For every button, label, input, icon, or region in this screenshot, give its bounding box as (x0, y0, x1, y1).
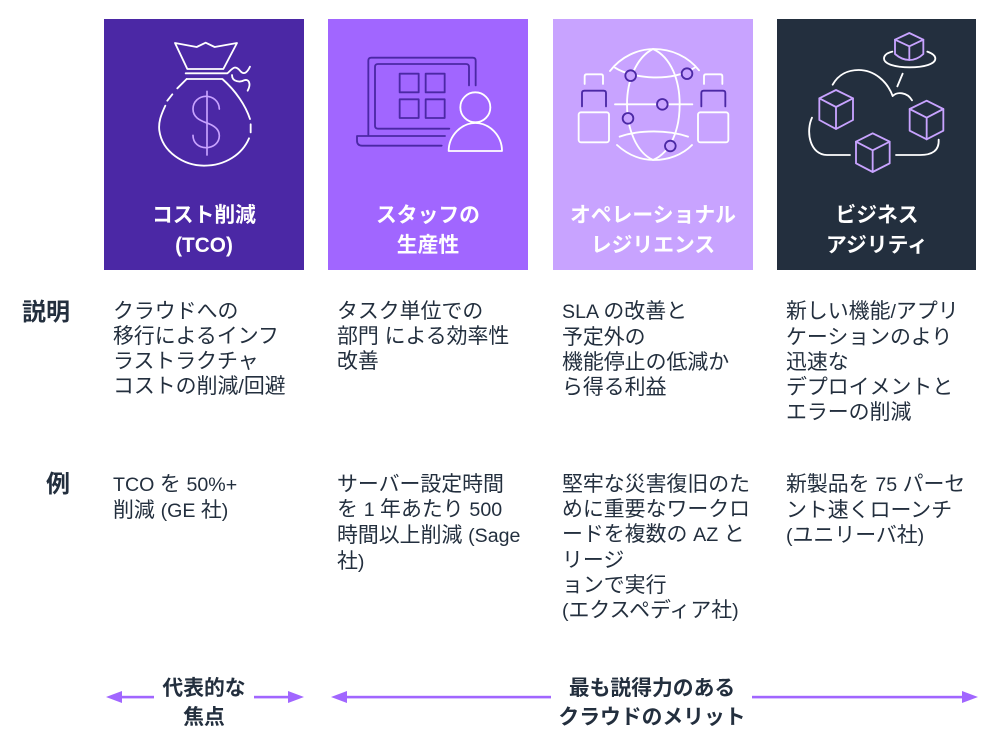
footer label: compelling benefits: クラウドのメリット (558, 706, 746, 729)
arrow: typical focus left (106, 691, 154, 703)
heading: business agility: アジリティ (826, 234, 928, 257)
heading: operational resilience (570, 204, 736, 257)
description: cost: コストの削減/回避 (113, 375, 286, 398)
heading: cost reduction (152, 204, 256, 257)
panel: business agility (777, 19, 976, 270)
row label: description: 説明 (22, 299, 70, 326)
description: resilience: ら得る利益 (562, 376, 666, 399)
example: resilience: 堅牢な災害復旧のた (562, 473, 750, 496)
icon: globe and locks (578, 48, 730, 161)
description: resilience: 予定外の (562, 326, 646, 349)
example: agility: ント速くローンチ (786, 499, 952, 522)
description: agility: デプロイメントと (786, 376, 953, 399)
description: cost: クラウドへの (113, 300, 238, 323)
example: cost (113, 473, 237, 522)
example: staff (337, 473, 520, 573)
heading: cost reduction: コスト削減 (152, 204, 256, 227)
panel: staff productivity (328, 19, 528, 270)
example: cost: TCO を 50%+ (113, 473, 237, 496)
example: staff: を 1 年あたり 500 (337, 498, 502, 521)
description: resilience: SLA の改善と (562, 300, 687, 323)
heading: cost reduction: (TCO) (175, 234, 233, 257)
example: agility: 新製品を 75 パーセ (786, 473, 965, 496)
description: cost: ラストラクチャ (113, 350, 259, 373)
description: agility: エラーの削減 (786, 401, 911, 424)
footer label: typical focus: 焦点 (183, 706, 225, 729)
footer label: compelling benefits: 最も説得力のある (569, 677, 735, 700)
arrow: compelling benefits left (331, 691, 551, 703)
description: cost: 移行によるインフ (113, 325, 279, 348)
icon: money bag (158, 42, 252, 167)
description: staff: 部門 による効率性 (337, 325, 509, 348)
example: staff: サーバー設定時間 (337, 473, 504, 496)
panel: operational resilience (553, 19, 753, 270)
example: agility: (ユニリーバ社) (786, 524, 924, 547)
description: agility (786, 300, 959, 424)
description: agility: ケーションのより (786, 326, 952, 349)
example: cost: 削減 (GE 社) (113, 499, 228, 522)
example: resilience: ョンで実行 (562, 574, 666, 597)
example: resilience: リージ (562, 549, 624, 572)
footer label: typical focus: 代表的な (162, 677, 246, 700)
heading: business agility: ビジネス (835, 204, 919, 227)
heading: operational resilience: オペレーショナル (570, 204, 736, 227)
example: staff: 社) (337, 550, 364, 573)
footer label: compelling benefits (558, 676, 746, 729)
description: agility: 迅速な (786, 351, 849, 374)
example: resilience: ードを複数の AZ と (562, 523, 745, 546)
description: resilience: 機能停止の低減か (562, 351, 729, 374)
icon: laptop and person (356, 56, 503, 152)
example: resilience (562, 473, 750, 622)
description: resilience (562, 300, 729, 399)
icon: cloud and cubes (808, 32, 944, 173)
heading: staff productivity: 生産性 (397, 234, 459, 257)
description: staff (337, 300, 509, 373)
heading: operational resilience: レジリエンス (591, 234, 715, 257)
heading: staff productivity: スタッフの (376, 204, 480, 227)
description: staff: タスク単位での (337, 300, 483, 323)
example: staff: 時間以上削減 (Sage (337, 524, 520, 547)
panel: cost reduction (104, 19, 304, 270)
footer label: typical focus (162, 676, 246, 729)
description: cost (113, 300, 286, 398)
description: staff: 改善 (337, 350, 379, 373)
example: agility (786, 473, 965, 547)
heading: business agility (826, 204, 928, 257)
arrow: compelling benefits right (752, 691, 978, 703)
example: resilience: (エクスペディア社) (562, 599, 739, 622)
arrow: typical focus right (254, 691, 304, 703)
heading: staff productivity (376, 204, 480, 257)
description: agility: 新しい機能/アプリ (786, 300, 959, 323)
row label: example: 例 (46, 471, 70, 498)
example: resilience: めに重要なワークロ (562, 498, 750, 521)
